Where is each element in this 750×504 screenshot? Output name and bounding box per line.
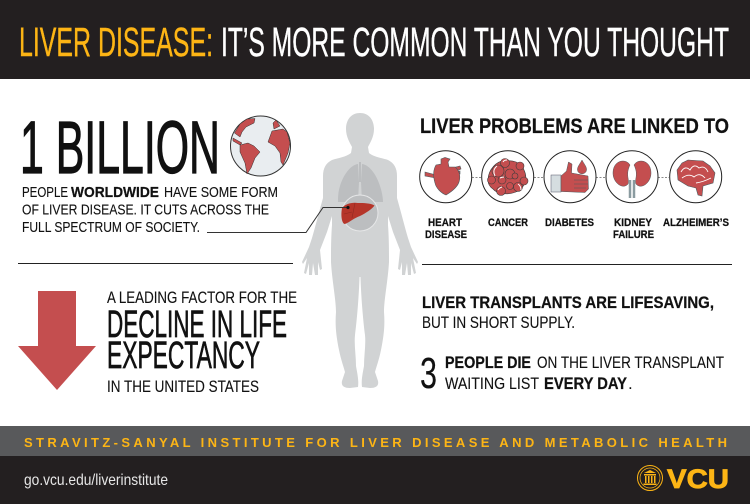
institute band: [0, 426, 750, 456]
condition labels: DIABETES: [545, 217, 594, 229]
institute band: STRAVITZ-SANYAL INSTITUTE FOR LIVER DISEASE AND METABOLIC HEALTH: [24, 435, 727, 450]
condition labels: [425, 217, 729, 241]
panel: linked conditions: [420, 115, 729, 241]
big number: 1 BILLION: [20, 106, 220, 189]
life expectancy text: IN THE UNITED STATES: [107, 378, 259, 396]
lungs: [338, 162, 383, 202]
panel: transplants: [420, 293, 724, 398]
waiting list text: EVERY DAY: [544, 374, 628, 393]
icon: globe: [230, 116, 290, 176]
title: LIVER DISEASE:: [19, 19, 213, 65]
icon: brain: [670, 151, 722, 203]
life expectancy text: EXPECTANCY: [107, 335, 260, 377]
panel: 1 billion statistic: [20, 106, 290, 236]
icon: thumbs up with blood drop: [544, 151, 596, 203]
stomach area circle: [342, 195, 378, 231]
header banner: [0, 0, 750, 79]
life expectancy text: A LEADING FACTOR FOR THE: [107, 288, 297, 307]
body silhouette: [302, 113, 418, 388]
description text: OF LIVER DISEASE. IT CUTS ACROSS THE: [22, 202, 269, 218]
icon: down arrow: [18, 291, 96, 390]
description text: [22, 184, 278, 236]
waiting list text: WAITING LIST: [445, 374, 539, 393]
waiting list text: PEOPLE DIE: [445, 353, 531, 372]
icon: kidneys: [606, 151, 658, 203]
condition labels: CANCER: [488, 217, 528, 229]
url: go.vcu.edu/liverinstitute: [24, 472, 168, 489]
transplant statement: [422, 293, 714, 332]
panel: life expectancy: [18, 288, 297, 396]
description text: WORLDWIDE: [71, 184, 159, 201]
icon: heart: [420, 151, 472, 203]
description text: PEOPLE: [22, 184, 68, 201]
waiting list text: .: [628, 374, 633, 393]
figure: human body: [302, 113, 418, 388]
description text: FULL SPECTRUM OF SOCIETY.: [22, 219, 200, 236]
big number 3: 3: [420, 349, 437, 398]
waiting list text: [445, 353, 724, 393]
icon: liver: [341, 203, 374, 224]
transplant statement: LIVER TRANSPLANTS ARE LIFESAVING,: [422, 293, 714, 312]
logo: VCU: VCU: [667, 464, 729, 494]
logo: VCU: [638, 464, 729, 494]
description text: HAVE SOME FORM: [164, 184, 278, 201]
condition labels: ALZHEIMER’S: [663, 217, 729, 229]
condition labels: DISEASE: [425, 229, 467, 241]
title: [19, 19, 729, 65]
icon: cancer cells: [482, 151, 534, 203]
condition labels: HEART: [428, 217, 462, 229]
life expectancy text: [107, 288, 297, 396]
leader line to liver: [207, 206, 350, 232]
footer: [0, 456, 750, 504]
condition labels: FAILURE: [613, 229, 654, 241]
life expectancy text: DECLINE IN LIFE: [107, 304, 287, 346]
transplant statement: BUT IN SHORT SUPPLY.: [422, 313, 575, 332]
condition labels: KIDNEY: [614, 217, 653, 229]
